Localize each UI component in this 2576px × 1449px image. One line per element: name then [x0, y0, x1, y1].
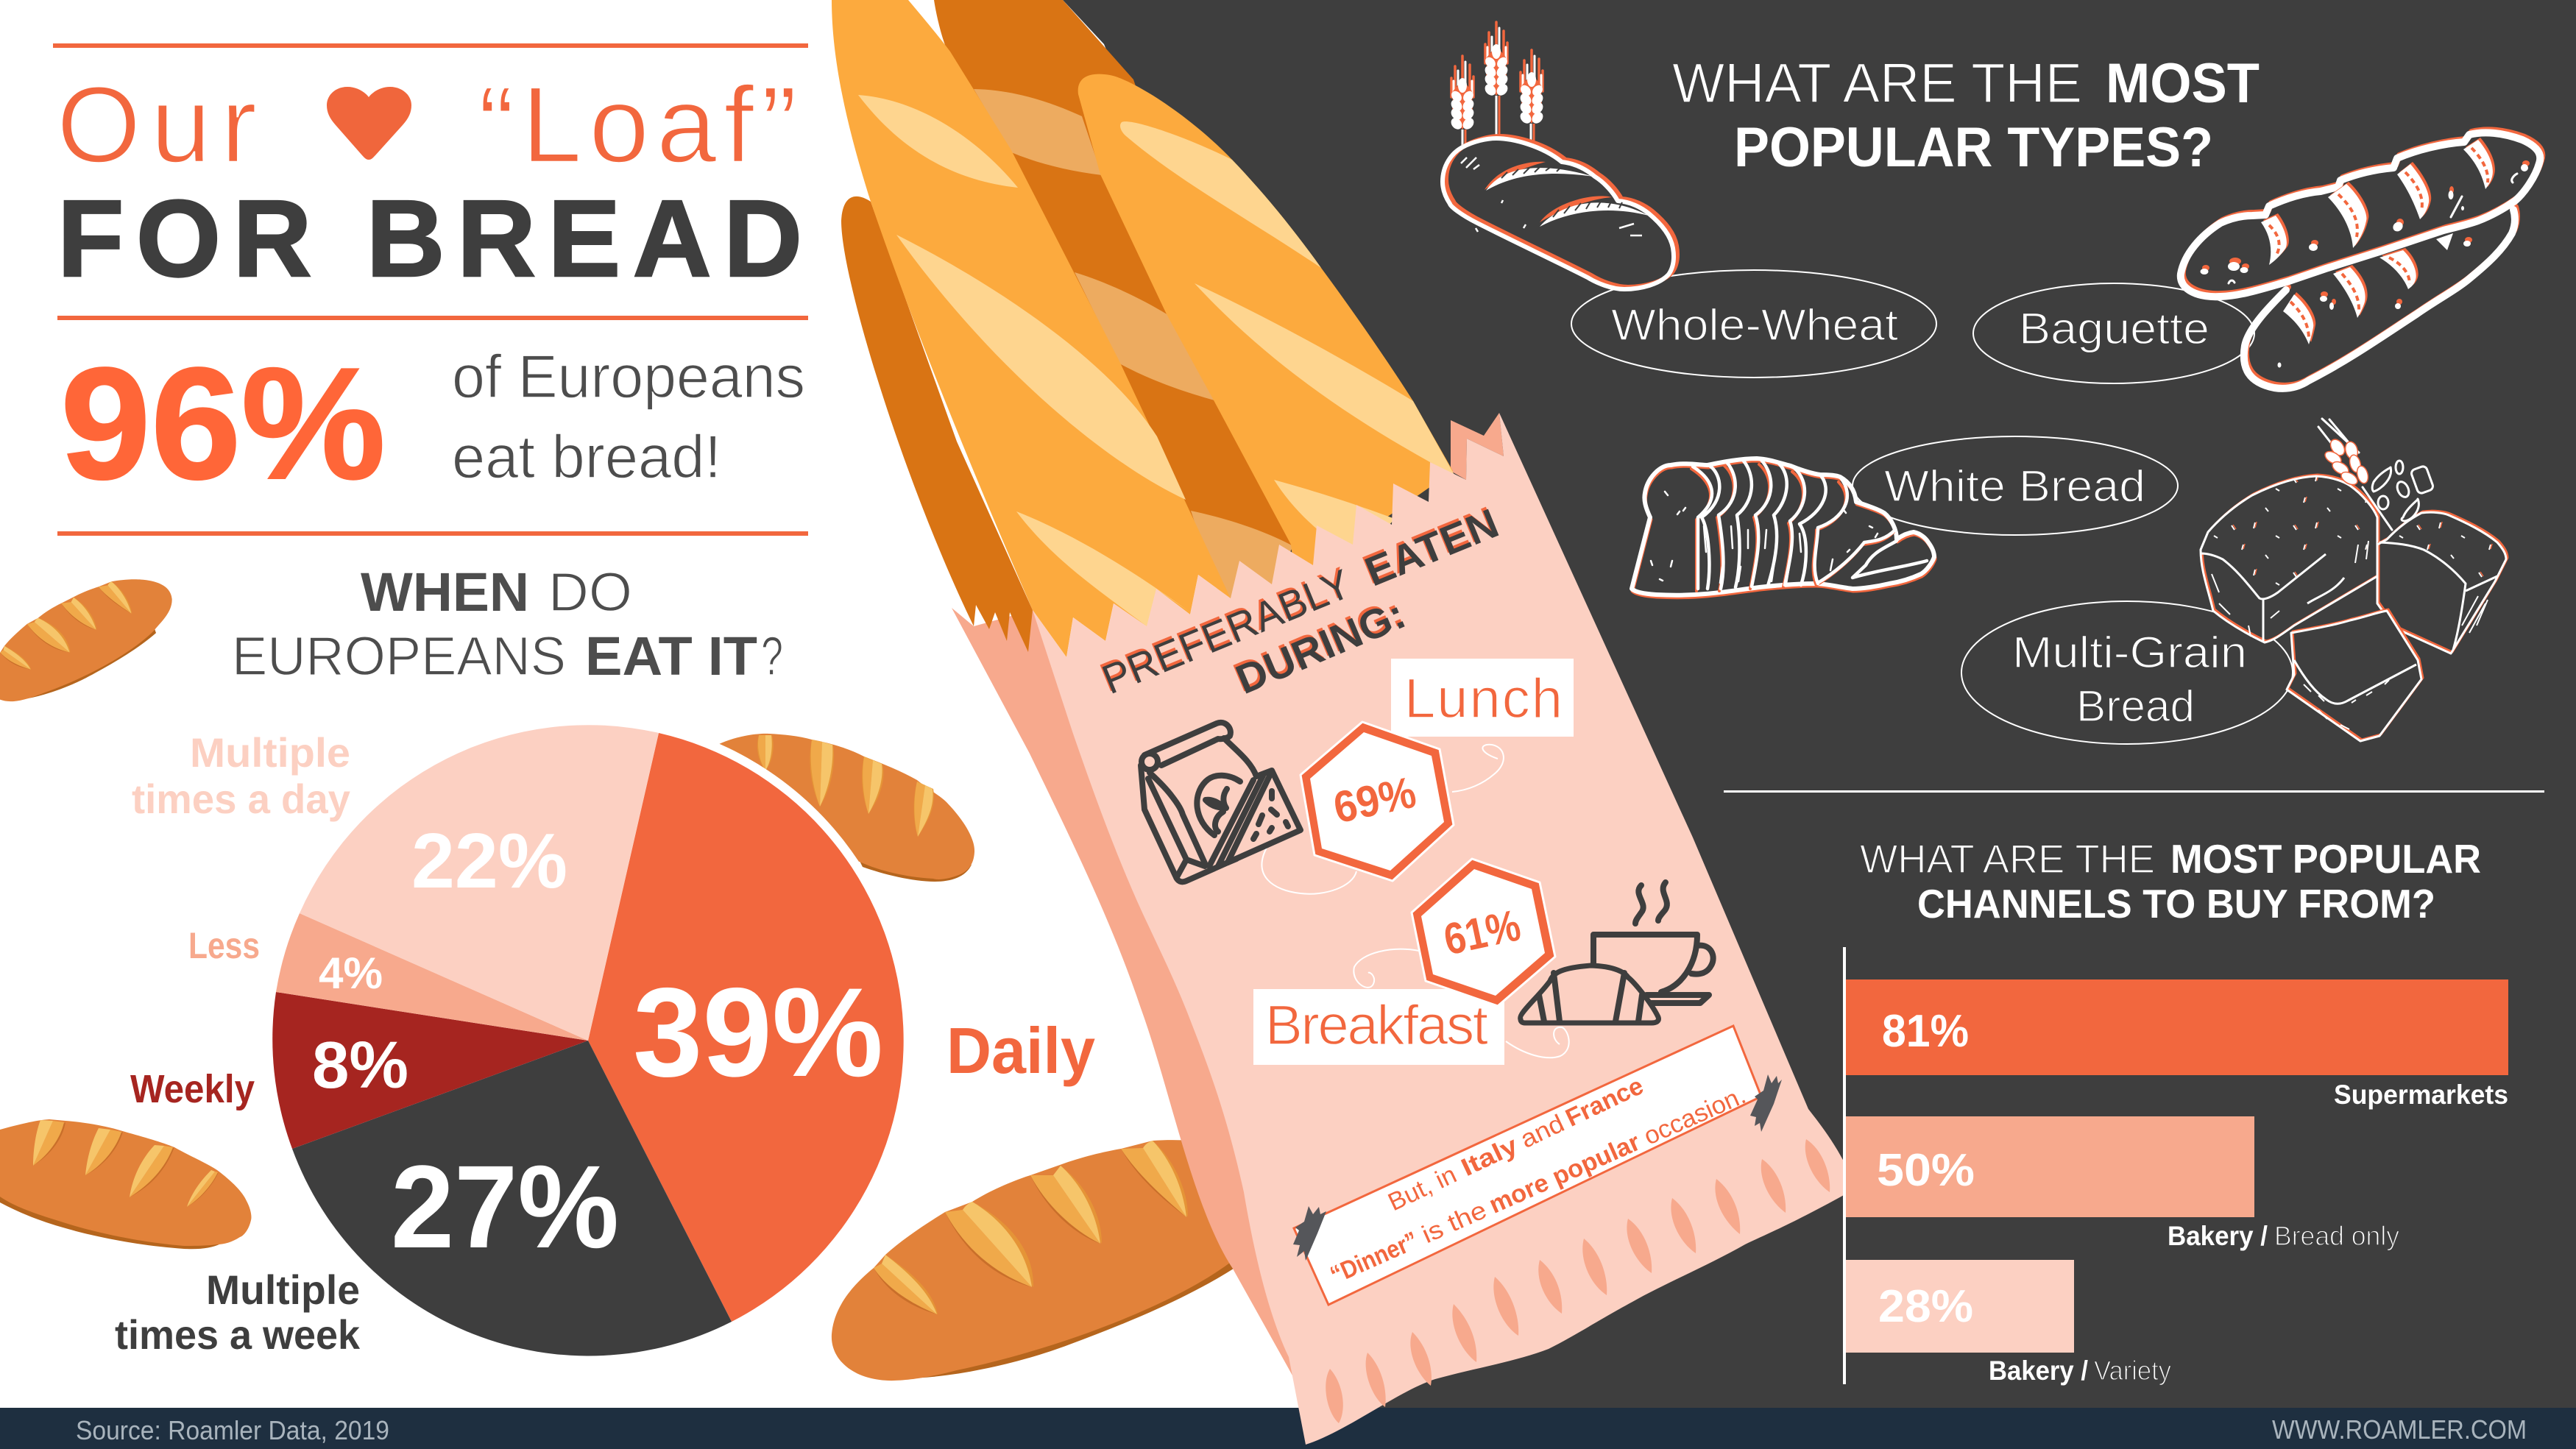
pie labels: Weekly [130, 1067, 255, 1111]
heading: preferably eaten during: EATEN [1359, 500, 1505, 595]
bar: Bakery bread only 50% [1846, 1116, 2399, 1251]
back baguette [934, 0, 1293, 611]
footer bar [0, 1408, 2576, 1449]
decorative swirl lines [1262, 745, 1569, 1057]
heading: when do Europeans eat it: EAT IT [585, 626, 757, 687]
heading: popular channels: CHANNELS TO BUY FROM? [1917, 881, 2435, 927]
pie values [312, 818, 883, 1272]
label: Baguette: Baguette [2019, 304, 2209, 353]
label: White Bread: White Bread [1884, 461, 2145, 511]
panel: paper bag front [1033, 413, 1844, 1445]
heading: popular channels: WHAT ARE THE [1860, 836, 2155, 882]
label: Breakfast: Breakfast [1265, 994, 1488, 1057]
illustration: top-left loaf [0, 574, 185, 704]
hexagon: 69%: 69% [1329, 768, 1420, 832]
heading: most popular types [1672, 52, 2260, 179]
note line 1 [1384, 1071, 1648, 1216]
note line 2 [1326, 1081, 1750, 1289]
pie labels: Multiple [206, 1266, 360, 1313]
pie labels: Multiple [190, 729, 350, 776]
heading: most popular types: MOST [2106, 52, 2260, 115]
bar: Supermarkets 81% [1846, 979, 2508, 1110]
wheat ear and seeds [2318, 419, 2434, 530]
pie labels: times a week [115, 1311, 361, 1358]
pie labels [115, 729, 1095, 1358]
heading: preferably eaten during [1094, 497, 1505, 703]
label: Multi-Grain Bread [1961, 601, 2293, 744]
bar chart: channels [1843, 947, 2508, 1386]
hexagon: 61% [1412, 859, 1555, 1006]
bar: Bakery variety 28%: 28% [1878, 1281, 1973, 1332]
stat caption: of Europeans [452, 342, 805, 411]
slice: Multiple times a day 22% [300, 725, 659, 1041]
wheat stalks [1449, 22, 1545, 147]
pie labels: times a day [132, 776, 350, 822]
lower baguette [2244, 207, 2517, 389]
tape left [1293, 1206, 1326, 1261]
footer: website: WWW.ROAMLER.COM [2272, 1414, 2527, 1445]
note line 1: Italy [1457, 1131, 1522, 1182]
heading: when do Europeans eat it: DO [548, 561, 632, 623]
label: Whole-Wheat [1571, 270, 1936, 378]
bar: Bakery bread only 50%: Bread only [2274, 1221, 2399, 1251]
illustration: large loaf behind bag [832, 1140, 1284, 1381]
stat caption: eat bread! [452, 422, 721, 491]
pie values: 39% [633, 962, 883, 1103]
divider [1724, 790, 2544, 793]
heading: preferably eaten during: PREFERABLY [1094, 558, 1355, 701]
bag fringe pattern [1326, 1139, 1830, 1423]
icon: coffee and croissant [1521, 882, 1713, 1023]
title: FOR BREAD: FOR BREAD [57, 178, 802, 300]
slice: Weekly 8% [272, 992, 588, 1149]
pie values: 22% [411, 818, 567, 904]
icon: whole-wheat loaf [1443, 22, 1677, 289]
right front baguette [1078, 74, 1455, 581]
bar: Bakery variety 28% [1846, 1260, 2171, 1386]
slice: Less 4% [276, 913, 588, 1041]
illustration: bottom-left loaf [0, 1119, 251, 1249]
heading: when do Europeans eat it [232, 561, 783, 687]
note line 2: “Dinner” [1326, 1227, 1422, 1289]
grain loaf right [2377, 511, 2508, 653]
note line 2: is the [1418, 1196, 1491, 1249]
bar: Bakery variety 28%: Variety [2094, 1356, 2171, 1386]
heading: preferably eaten during: PREFERABLY [1096, 560, 1357, 703]
bag back: left fold [952, 608, 1325, 1435]
label: Lunch: Lunch [1404, 667, 1563, 730]
pie values: 8% [312, 1029, 408, 1102]
bar: Bakery bread only 50%: Bakery / [2168, 1221, 2268, 1251]
heading: most popular types: POPULAR TYPES? [1734, 116, 2213, 179]
hexagon: 69% [1301, 722, 1454, 881]
heading: popular channels: MOST POPULAR [2170, 836, 2481, 882]
label: Multi-Grain Bread: Multi-Grain [2012, 628, 2247, 677]
pie chart [263, 716, 913, 1365]
label: Baguette [1973, 283, 2254, 383]
bar: Bakery variety 28%: Bakery / [1989, 1356, 2088, 1386]
heading: preferably eaten during: DURING: [1229, 590, 1412, 703]
icon: baguettes [2181, 130, 2542, 389]
pie values: 27% [391, 1141, 619, 1272]
pie labels: Less [188, 925, 260, 966]
grain slice [2287, 609, 2423, 741]
note line 1: and [1516, 1109, 1568, 1154]
label: Whole-Wheat: Whole-Wheat [1611, 300, 1898, 350]
pie labels: Daily [946, 1014, 1095, 1087]
pie values: 4% [319, 949, 383, 998]
upper baguette [2181, 130, 2542, 297]
label: Lunch [1391, 659, 1574, 737]
icon: lunch bag and sandwich [1141, 723, 1301, 882]
note line 2: more popular [1485, 1128, 1644, 1219]
title: Loaf: “Loaf” [478, 65, 797, 185]
stat caption [452, 342, 805, 491]
stat: 96%: 96% [60, 334, 386, 512]
far-left baguette [841, 196, 1033, 652]
footer: source: Source: Roamler Data, 2019 [76, 1415, 389, 1445]
heading: popular channels [1860, 836, 2481, 927]
note line 1: But, in [1384, 1161, 1461, 1216]
heading: preferably eaten during: EATEN [1356, 497, 1503, 593]
icon: multi-grain bread [2201, 419, 2508, 741]
label: Multi-Grain Bread: Bread [2076, 681, 2195, 731]
illustration: baguettes [832, 0, 1455, 657]
bar: Supermarkets 81%: 81% [1882, 1006, 1969, 1057]
hexagon: 61%: 61% [1440, 900, 1525, 965]
slice: Daily 39% [588, 733, 904, 1322]
title: Our: Our [57, 65, 257, 185]
note: Italy and France dinner [1293, 1026, 1782, 1305]
slice: Multiple times a week 27% [292, 1041, 732, 1356]
note line 1: France [1561, 1071, 1648, 1133]
heading: most popular types: WHAT ARE THE [1672, 52, 2082, 115]
heading: preferably eaten during: DURING: [1227, 588, 1409, 701]
panel: title block [53, 43, 808, 536]
tape right [1750, 1074, 1782, 1132]
note line 2: occasion. [1640, 1081, 1750, 1151]
left front baguette [832, 0, 1231, 657]
heading: when do Europeans eat it: EUROPEANS [232, 626, 566, 687]
baguette crumbs [2201, 160, 2530, 368]
grain loaf left [2201, 475, 2379, 642]
heading: when do Europeans eat it: WHEN [361, 561, 529, 623]
illustration: loaf behind pie [718, 734, 974, 882]
dark right panel background [1063, 0, 2576, 1409]
bar: Supermarkets 81%: Supermarkets [2334, 1080, 2508, 1110]
axis [1843, 947, 1846, 1384]
bag back: right flap [1451, 413, 1504, 480]
heading: when do Europeans eat it: ? [761, 626, 783, 687]
bar: Bakery bread only 50%: 50% [1877, 1145, 1975, 1196]
icon: sliced white bread [1632, 458, 1935, 598]
icon: heart [327, 87, 411, 160]
label: White Bread [1853, 436, 2178, 535]
